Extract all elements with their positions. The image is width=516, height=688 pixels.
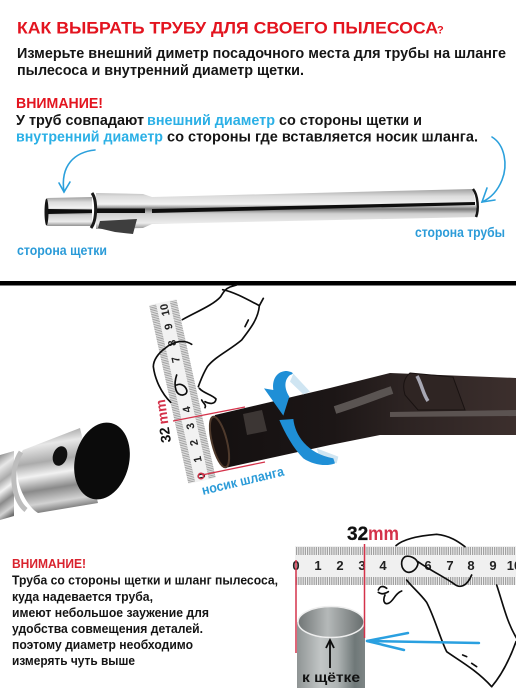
measuring ruler, horizontal: 2 <box>336 558 344 573</box>
measuring ruler, vertical <box>149 299 216 484</box>
measuring ruler, vertical: 3 <box>185 422 198 430</box>
label: 32 mm rotated: 32mm <box>152 399 174 444</box>
warning heading: ВНИМАНИЕ! <box>16 96 103 112</box>
label: brush side: сторона щетки <box>17 243 107 258</box>
measuring ruler, horizontal <box>292 546 516 585</box>
hand holding ruler <box>153 285 263 408</box>
slider button <box>404 373 465 410</box>
warning text: со стороны где вставляется носик шланга. <box>167 128 478 146</box>
blue arrow <box>367 633 479 650</box>
measuring ruler, horizontal: 7 <box>446 558 454 573</box>
bottom warning text: Труба со стороны щетки и шланг пылесоса, <box>12 572 278 588</box>
measuring ruler, vertical: 2 <box>188 438 201 447</box>
label: to brush: к щётке <box>302 669 360 685</box>
measurement 32 mm: 32 <box>347 524 368 545</box>
measuring ruler, horizontal: 3 <box>358 558 366 573</box>
measuring ruler, vertical: 10 <box>158 302 173 317</box>
warning text: внутренний диаметр <box>16 128 163 146</box>
cap <box>66 417 138 505</box>
measuring ruler, vertical: 1 <box>192 455 205 463</box>
measuring ruler, horizontal: 1 <box>314 558 322 573</box>
bottom warning heading: ВНИМАНИЕ! <box>12 557 86 571</box>
measuring ruler, vertical: 9 <box>163 322 176 331</box>
measuring ruler, horizontal: 8 <box>467 558 475 573</box>
arrow: pipe side <box>482 137 505 202</box>
measuring ruler, vertical: 8 <box>166 339 179 347</box>
chrome pipe with black cap <box>0 417 138 520</box>
arrow: brush side <box>59 150 95 192</box>
bottom warning text: удобства совмещения деталей. <box>12 621 203 636</box>
measurement 32 mm: mm <box>368 524 399 545</box>
measuring ruler, vertical: 0 <box>195 472 208 480</box>
measuring ruler, horizontal: 6 <box>424 558 432 573</box>
title: ? <box>437 24 444 36</box>
bottom warning text: поэтому диаметр необходимо <box>12 637 193 652</box>
warning text: внешний диаметр <box>147 112 275 129</box>
measuring ruler, vertical: 4 <box>181 404 194 414</box>
intro text: Измерьте внешний диметр посадочного места для трубы на шланге <box>17 45 506 62</box>
rotation arrow <box>264 371 338 465</box>
red measurement lines <box>173 407 265 479</box>
warning text: со стороны щетки и <box>279 112 422 129</box>
measuring ruler, horizontal: 9 <box>489 558 497 573</box>
bottom warning text: имеют небольшое заужение для <box>12 605 209 620</box>
label: pipe side: сторона трубы <box>415 225 505 240</box>
square clip <box>243 410 267 435</box>
lever <box>98 219 137 234</box>
red guide lines <box>296 544 364 653</box>
warning text: У труб совпадают <box>16 112 144 129</box>
hole <box>50 444 70 468</box>
black arrow in cylinder <box>326 640 334 668</box>
bottom warning text: куда надевается труба, <box>12 589 153 604</box>
divider bar <box>0 281 516 286</box>
bottom warning text: измерять чуть выше <box>12 653 135 668</box>
measurement 32 mm <box>347 524 399 545</box>
title: КАК ВЫБРАТЬ ТРУБУ ДЛЯ СВОЕГО ПЫЛЕСОСА <box>17 18 438 38</box>
hose with nozzle <box>206 373 516 469</box>
measuring ruler, vertical: 7 <box>170 355 183 364</box>
cylinder: pipe end <box>297 606 365 688</box>
hand holding ruler, bottom <box>378 534 516 687</box>
measuring ruler, horizontal: 4 <box>379 558 387 573</box>
label: hose nozzle: носик шланга <box>200 464 286 498</box>
intro text: пылесоса и внутренний диаметр щетки. <box>17 62 304 79</box>
telescopic pipe <box>44 189 478 234</box>
measuring ruler, horizontal: 0 <box>292 558 300 573</box>
